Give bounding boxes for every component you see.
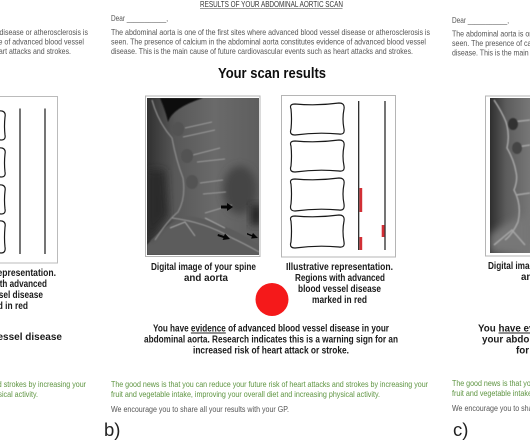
intro text (111, 27, 431, 56)
red calcification markers (360, 188, 384, 250)
good news text: The good news is that you can reduce your future risk of heart attacks and strokes by increasing your (111, 379, 428, 389)
panel a good news (0, 379, 86, 399)
panel c caption (488, 261, 530, 283)
panel a caption (0, 268, 56, 312)
illustration of spine and aorta (282, 96, 396, 257)
intro text: disease. This is the main cause of future cardiovascular events such as heart attacks and strokes. (111, 46, 413, 56)
panel c good news (452, 378, 530, 398)
image captions: blood vessel disease (298, 284, 381, 295)
finding statement: You have evidence of advanced blood vessel disease in your (153, 324, 389, 334)
aorta walls (359, 101, 385, 250)
panel a: cropped left letter (0, 27, 89, 399)
finding statement: increased risk of heart attack or stroke. (193, 346, 349, 356)
intro text: The abdominal aorta is one of the first sites where advanced blood vessel disease or atherosclerosis is (111, 27, 431, 37)
image captions: Digital image of your spine (151, 262, 256, 273)
label c: c) (453, 419, 468, 440)
panel b: central letter (111, 0, 431, 414)
image captions: and aorta (184, 273, 229, 284)
image captions: Regions with advanced (295, 273, 385, 284)
panel a intro text (0, 27, 89, 56)
good news text (111, 379, 428, 399)
good news text: fruit and vegetable intake, improving your overall diet and increasing physical activity. (111, 389, 380, 399)
arrows on x-ray (218, 203, 258, 240)
finding statement: abdominal aorta. Research indicates this is a warning sign for an (144, 334, 398, 346)
label b: b) (104, 419, 120, 440)
panel c finding (478, 324, 530, 356)
panel c x-ray (486, 96, 530, 256)
panel c: cropped right letter (452, 15, 530, 413)
image captions: Illustrative representation. (286, 262, 393, 273)
red risk indicator circle (256, 283, 288, 316)
finding statement (144, 324, 398, 356)
panel a illustration (0, 96, 58, 263)
greeting: Dear ___________, (111, 13, 168, 23)
panel c intro text (452, 28, 530, 58)
image captions: marked in red (312, 295, 367, 306)
x-ray image of spine and aorta (146, 96, 262, 256)
panel c greeting: Dear ___________, (452, 15, 509, 25)
heading: your scan results: Your scan results (218, 66, 326, 82)
intro text: seen. The presence of calcium in the abdominal aorta constitutes evidence of advanced blood vessel (111, 36, 426, 46)
vertebrae (290, 103, 344, 248)
GP advice: We encourage you to share all your results with your GP. (111, 404, 289, 414)
image captions (151, 262, 393, 306)
